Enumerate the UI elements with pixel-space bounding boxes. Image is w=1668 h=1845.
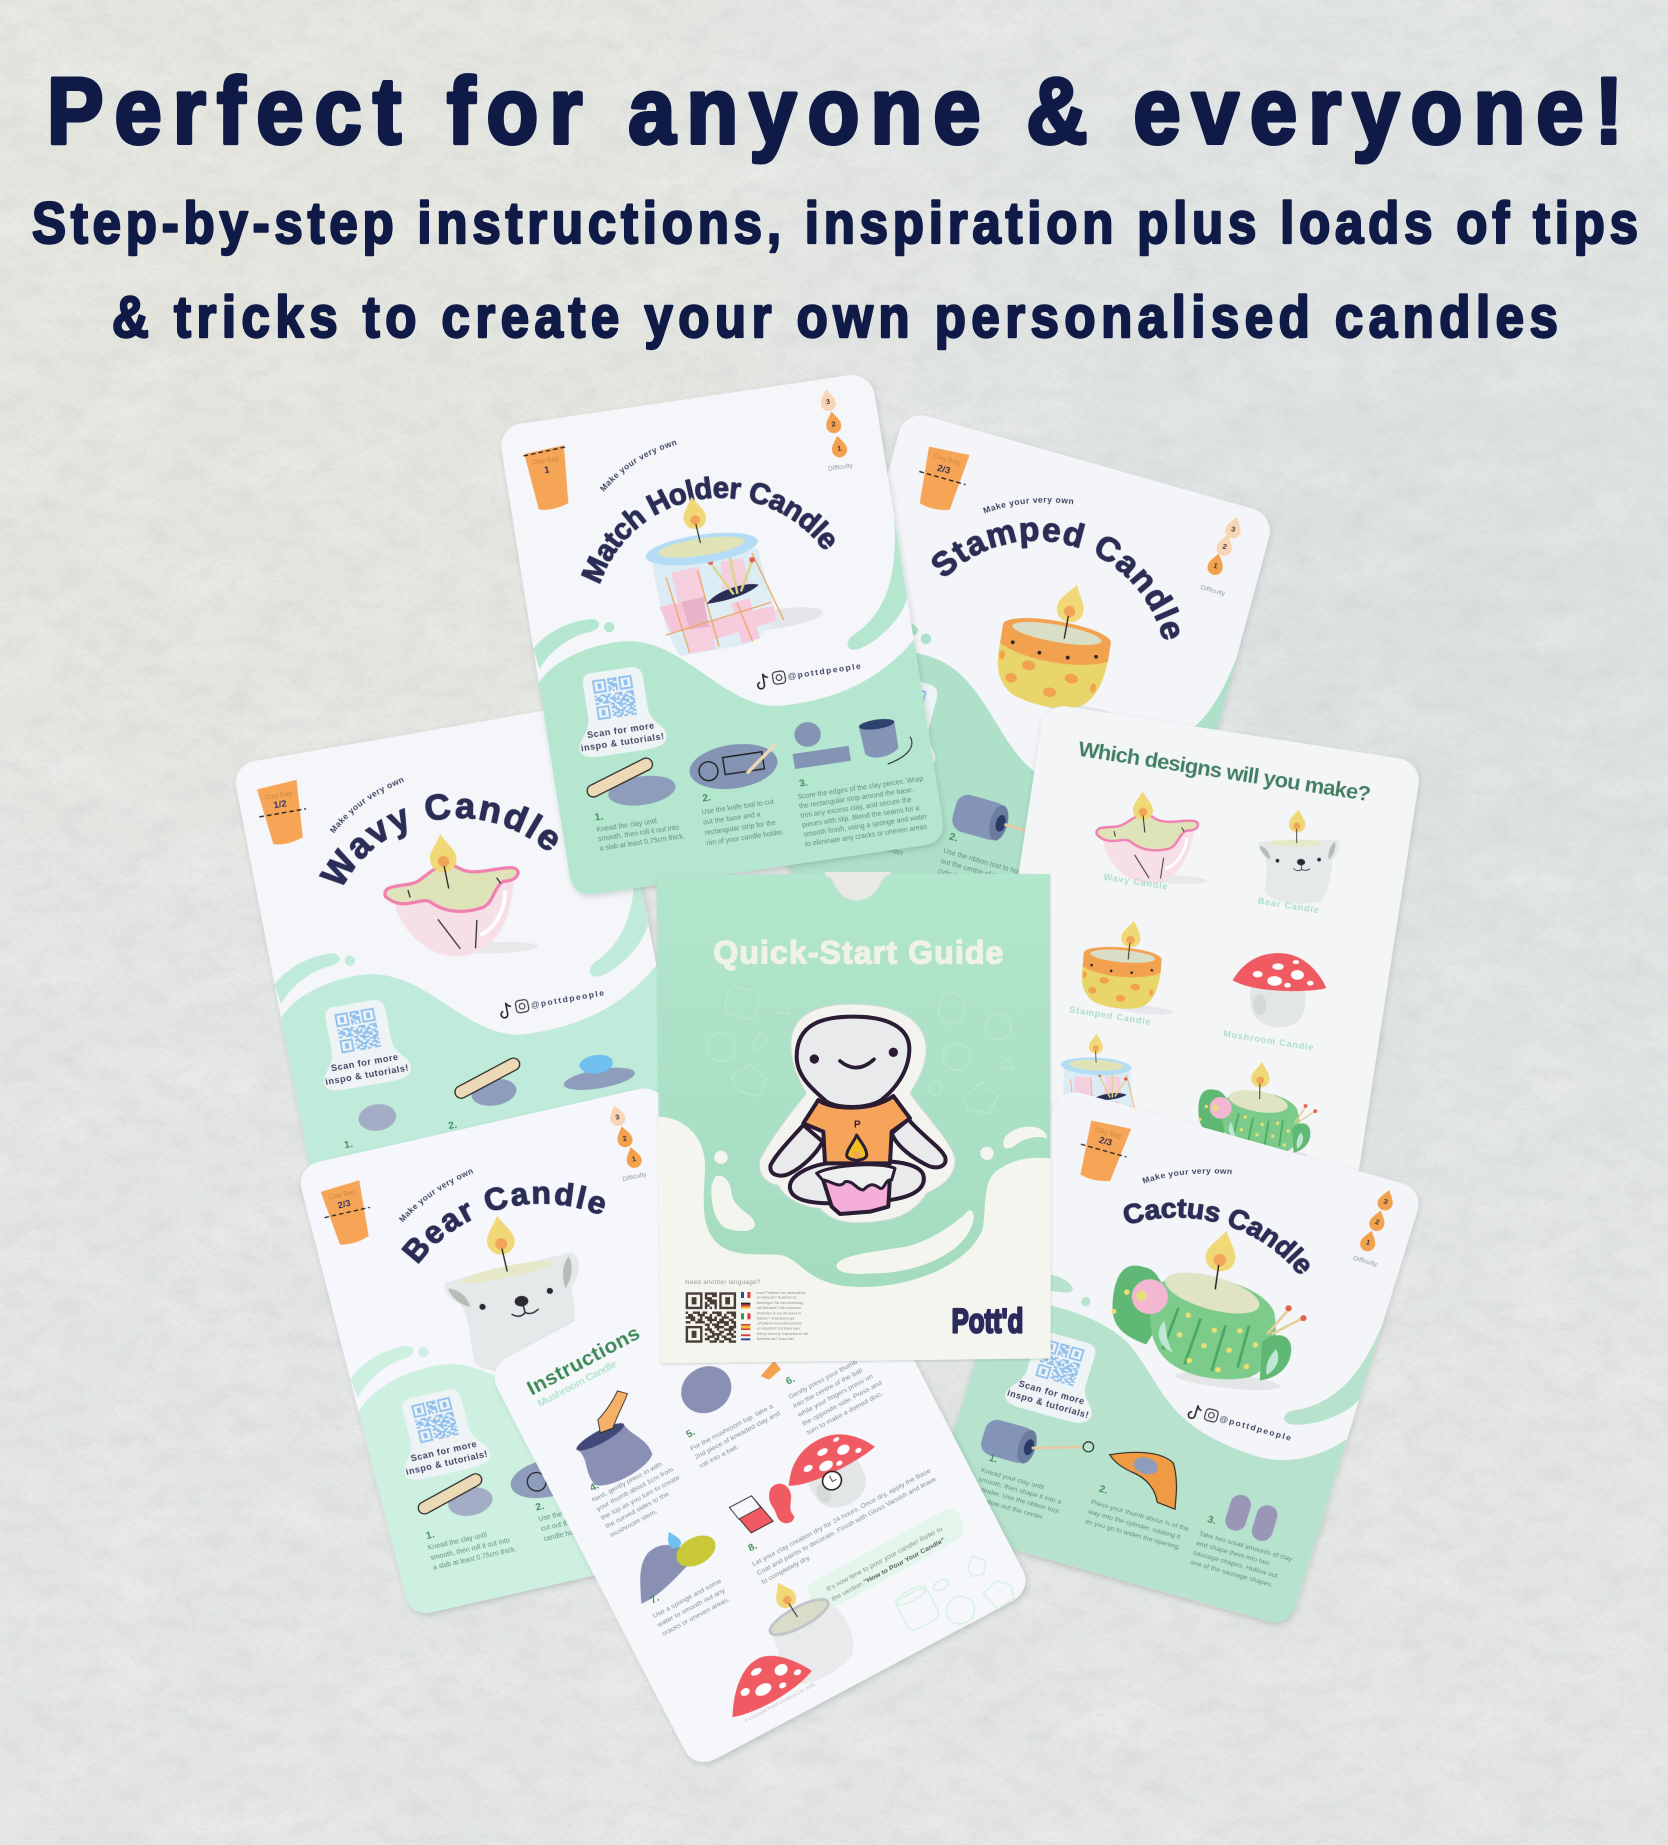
illustration: wavy candle	[382, 830, 539, 959]
step 2 ribbon tool: out the centre of the	[940, 857, 1003, 882]
difficulty scale: Difficulty	[1352, 1255, 1379, 1268]
icon: clay bag: 2/3	[1098, 1135, 1113, 1148]
design: cactus candle	[1183, 1043, 1332, 1178]
difficulty scale: 2	[1221, 542, 1228, 552]
step 2	[686, 738, 790, 848]
heading: make your very own: Make your very own	[982, 498, 1074, 514]
step 3	[786, 707, 931, 848]
social handle: @pottdpeople	[1218, 1413, 1293, 1443]
step 2	[506, 1449, 611, 1547]
step 1: a slab at least 0.75cm thick.	[432, 1546, 517, 1572]
design: stamped candle: Stamped Candle	[1069, 1005, 1152, 1027]
step 2: Use the knife tool to	[538, 1503, 599, 1523]
difficulty scale: 2	[1374, 1217, 1381, 1227]
panel: wavy candle card	[235, 711, 658, 1166]
panel: stamped candle card: inspo & tutorials!	[848, 733, 934, 766]
step 5	[660, 1344, 786, 1470]
language prompts: Heb je liever je instructies in het	[757, 1332, 808, 1336]
step 1: 1.	[594, 811, 604, 824]
illustration: match holder candle	[637, 481, 826, 659]
step 6: the opposite side. Press and	[801, 1380, 883, 1428]
step 1: 1.	[425, 1529, 436, 1542]
step 1: 1.	[987, 1453, 999, 1466]
step 1: cylinder. Use the ribbon tool	[975, 1485, 1060, 1515]
panel: instructions card	[487, 1188, 1033, 1770]
copyright: © Copyright Pott'd Creations Ltd. 2025	[744, 1681, 816, 1723]
subtitle line 1: Step-by-step instructions, inspiration plus loads of tips	[32, 191, 1638, 256]
step 4: your thumb about 1cm from	[595, 1466, 675, 1513]
panel: bear candle card: inspo & tutorials!	[405, 1449, 489, 1477]
step 3: one of the sausage shapes.	[1189, 1559, 1274, 1589]
step 5: 5.	[685, 1427, 697, 1441]
step 3: 3.	[798, 777, 809, 790]
design: stamped candle	[1069, 909, 1187, 1030]
panel: match holder candle card: Scan for more	[586, 720, 655, 740]
step 2: cut out the base and a	[540, 1511, 609, 1533]
design: mushroom candle	[1220, 940, 1337, 1054]
step 1: Knead your clay until	[980, 1467, 1045, 1491]
icon: clay bag: Clay Bag	[265, 790, 293, 802]
step 1	[964, 1414, 1095, 1528]
social handle: @pottdpeople	[530, 987, 605, 1010]
step 6: turn to make a domed disc.	[806, 1390, 884, 1437]
step 7: cracks or uneven areas.	[661, 1596, 731, 1638]
text: need another language: Need another language?	[685, 1279, 761, 1286]
step 4: 4.	[588, 1480, 601, 1494]
difficulty scale: 1	[631, 1154, 637, 1164]
step 6	[757, 1320, 888, 1444]
heading: make your very own: Make your very own	[398, 1169, 474, 1222]
design: mushroom candle: Mushroom Candle	[1223, 1029, 1315, 1053]
QR code	[686, 1294, 736, 1342]
step 2: as you go to widen the opening.	[1084, 1518, 1181, 1551]
icon: clay bag: Clay Bag	[532, 455, 559, 466]
pale line icons	[893, 1546, 1018, 1650]
pale candle icons	[707, 985, 1013, 1113]
icon: clay bag	[317, 1179, 378, 1248]
steps art	[333, 1036, 640, 1151]
flags	[741, 1292, 750, 1340]
panel: bear candle card: Scan for more	[410, 1439, 478, 1464]
panel: wavy candle card: inspo & tutorials!	[324, 1063, 410, 1087]
step 1: a slab at least 0.75cm thick.	[599, 833, 685, 853]
mascot: meditating figure with candle	[759, 1004, 955, 1223]
difficulty scale: 2	[622, 1133, 628, 1143]
panel: match holder candle card	[500, 375, 946, 900]
design: cactus candle: Cactus Candle	[1211, 1140, 1285, 1161]
step 2: rim of your candle holder.	[706, 829, 785, 847]
design: bear candle: Bear Candle	[1257, 896, 1320, 915]
panel: stamped candle card	[786, 416, 1272, 882]
icon: clay bag	[523, 445, 575, 512]
heading: Which designs will you make?	[1077, 736, 1373, 806]
step 8: to completely dry.	[760, 1554, 812, 1586]
step 3: sausage shapes. Hollow out	[1192, 1549, 1278, 1580]
step 5: For the mushroom top, take a	[689, 1403, 774, 1453]
subtitle line 2: & tricks to create your own personalised candles	[112, 285, 1558, 350]
step 3: 3.	[1206, 1514, 1217, 1527]
mascot: meditating figure with candle: P	[854, 1119, 861, 1130]
step 8	[743, 1452, 942, 1586]
icon: clay bag: 2/3	[337, 1198, 352, 1211]
icon: clay bag: 1/2	[273, 798, 288, 812]
illustration: bear candle	[435, 1207, 593, 1379]
step 7: 7.	[649, 1593, 661, 1607]
social handle	[756, 659, 862, 689]
step 3: smooth finish, using a sponge and water	[803, 814, 928, 839]
step 6: while your fingers press on	[796, 1373, 874, 1419]
heading: make your very own: Make your very own	[600, 440, 677, 492]
step 8: 8.	[747, 1541, 759, 1554]
panel: match holder candle card: inspo & tutorials!	[580, 731, 665, 753]
language prompts: Preferisci le tue istruzioni in	[757, 1312, 801, 1316]
difficulty scale: Difficulty	[622, 1171, 648, 1183]
social handle	[1188, 1404, 1293, 1446]
step 3: to eliminate any cracks or uneven areas.	[805, 823, 930, 848]
mushroom cap	[714, 1639, 816, 1722]
QR sticker	[1003, 1326, 1111, 1427]
step 3: Score the edges of the clay pieces. Wrap	[797, 776, 924, 801]
panel: which designs will you make card	[973, 703, 1422, 1227]
step 2 ribbon tool: 2.	[948, 831, 959, 845]
design: wavy candle	[1085, 777, 1221, 898]
step 3: Take two small amounts of clay	[1198, 1530, 1294, 1563]
panel: wavy candle card: Scan for more	[330, 1052, 399, 1074]
callout: pour your candle: It's now time to pour your candle! Refer to	[826, 1526, 944, 1593]
difficulty scale: 1	[1212, 561, 1219, 571]
step 1	[582, 753, 685, 853]
language prompts: vous Préférez vos instructions	[757, 1291, 806, 1295]
heading: make your very own: Make your very own	[330, 778, 404, 834]
step 1	[411, 1468, 517, 1572]
step 5: roll into a ball.	[698, 1444, 740, 1470]
heading: bear candle: Bear Candle	[401, 1182, 606, 1264]
icon: clay bag: Clay Bag	[932, 453, 961, 467]
difficulty scale: 3	[614, 1112, 620, 1122]
language prompts: ¿Prefieres tus instrucciones	[757, 1322, 802, 1326]
icon: clay bag: Clay Bag	[1094, 1126, 1122, 1140]
callout: pour your candle	[804, 1505, 970, 1615]
step 2 ribbon tool: cylinder	[937, 867, 963, 882]
difficulty scale	[1200, 512, 1246, 598]
icon: clay bag: Clay Bag	[328, 1189, 356, 1201]
heading: stamped candle: Stamped Candle	[931, 522, 1180, 640]
language prompts: en español? Escanea aquí	[757, 1327, 800, 1331]
heading: instructions: Instructions	[523, 1322, 644, 1400]
step 1: Knead the clay until	[596, 818, 658, 834]
difficulty scale: 2	[831, 419, 836, 429]
step 4: the top as you turn to create	[600, 1474, 681, 1522]
step 2: 2.	[1097, 1484, 1109, 1497]
heading: wavy candle: Wavy Candle	[318, 793, 558, 886]
difficulty scale: 3	[1230, 524, 1237, 534]
icon: clay bag	[911, 443, 973, 516]
step 3: trim any excess clay, and secure the	[800, 797, 912, 820]
language prompts: auf Deutsch? Hier scannen	[757, 1306, 801, 1310]
step 7: water to smooth out any	[656, 1587, 727, 1629]
difficulty scale: 1	[1365, 1238, 1371, 1247]
QR sticker: inspo & tutorials!	[1006, 1388, 1090, 1420]
icon: clay bag: 2/3	[936, 463, 951, 477]
booklet behind sleeve notch	[825, 872, 891, 904]
icon: clay bag	[254, 779, 312, 847]
step 3: pieces with slip. Blend the seams for a	[802, 805, 920, 830]
step 2: rectangular strip for the	[705, 820, 777, 837]
language prompts	[757, 1291, 808, 1341]
step 4: mushroom stem.	[609, 1509, 659, 1539]
step 7	[618, 1515, 743, 1640]
heading: mushroom candle: Mushroom Candle	[536, 1358, 619, 1410]
panel: bear candle card	[300, 1088, 660, 1618]
difficulty scale	[1352, 1186, 1400, 1268]
paint tube and splat	[730, 1479, 803, 1545]
step 3	[1189, 1487, 1307, 1592]
step 2: Use the knife tool to cut	[701, 799, 774, 816]
step 2: 2.	[534, 1501, 546, 1513]
step 4: Next, gently press in with	[591, 1461, 663, 1504]
steps art: 1.	[343, 1139, 354, 1151]
white lower section	[658, 1117, 1051, 1363]
design: wavy candle: Wavy Candle	[1103, 872, 1169, 892]
step 8: Coat and paints to decorate. Finish with Gloss Varnish and leave	[756, 1476, 938, 1577]
title: Perfect for anyone & everyone!	[47, 58, 1623, 163]
step 2: Press your thumb about ¾ of the	[1090, 1499, 1190, 1533]
difficulty scale: Difficulty	[828, 462, 854, 473]
step 1: smooth, then roll it out into	[430, 1537, 511, 1562]
step 6: Gently press your thumb	[788, 1359, 859, 1401]
difficulty scale	[816, 387, 854, 473]
difficulty scale: 3	[1382, 1197, 1389, 1207]
design: match holder candle	[1037, 1020, 1176, 1143]
panel: cactus candle card	[952, 1092, 1421, 1627]
design: bear candle	[1246, 800, 1349, 918]
design: match holder candle: Match Holder Candle	[1037, 1113, 1144, 1139]
heading: quick-start guide: Quick-Start Guide	[713, 934, 1003, 970]
steps art: 2.	[447, 1120, 458, 1132]
language prompts: en français? Scannez ici	[757, 1296, 796, 1300]
callout: pour your candle: the section "How to Pour Your Candle".	[831, 1536, 948, 1603]
difficulty scale	[604, 1102, 648, 1183]
difficulty scale: 1	[836, 443, 842, 453]
illustration: stamped candle	[991, 572, 1141, 724]
difficulty scale: 3	[825, 397, 831, 407]
heading: make your very own: Make your very own	[1142, 1168, 1232, 1184]
step 2: out the base and a	[703, 811, 761, 827]
step 6: into the centre of the ball	[792, 1367, 864, 1410]
step 1 fragment: into a cylinder	[860, 838, 904, 858]
step 2 ribbon tool: Use the ribbon tool to hollow	[943, 847, 1032, 879]
icon: clay bag: 1	[543, 464, 550, 476]
step 5: 2nd piece of kneaded clay and	[694, 1410, 782, 1461]
step 2	[1083, 1441, 1208, 1552]
step 2: way into the cylinder, rotating it	[1086, 1508, 1181, 1541]
illustration: cactus candle	[1104, 1218, 1316, 1396]
step 3: and shape them into two	[1195, 1540, 1271, 1567]
QR sticker: Scan for more	[1017, 1379, 1086, 1407]
step 1: smooth, then shape it into a	[977, 1476, 1062, 1506]
step 2 ribbon tool	[937, 792, 1072, 907]
language prompts: Nederlands? Scan hier	[757, 1337, 795, 1341]
step 7: Use a sponge and some	[652, 1578, 723, 1620]
logo: Pott'd	[952, 1303, 1023, 1341]
panel: quick-start guide sleeve	[657, 873, 1051, 1363]
step 2: 2.	[702, 793, 712, 805]
difficulty scale: Difficulty	[1200, 584, 1226, 598]
step 3: the rectangular strip around the base,	[799, 787, 914, 811]
step 6: 6.	[784, 1374, 797, 1388]
step 2: candle holder.	[543, 1527, 587, 1543]
step 1: Knead the clay until	[427, 1532, 488, 1552]
heading: match holder candle: Match Holder Candle	[580, 476, 835, 584]
step 4: the curved sides to the	[605, 1491, 671, 1531]
panel: stamped candle card: Scan for more	[860, 723, 929, 752]
language prompts: Benötigen Sie Ihre Anleitung	[757, 1301, 803, 1305]
language prompts: italiano? Scansiona qui	[757, 1316, 794, 1320]
social handle: @pottdpeople	[787, 661, 862, 682]
step 4	[553, 1384, 690, 1539]
social handle	[499, 986, 606, 1018]
step 8: Let your clay creation dry for 24 hours. Once dry, apply the Base	[751, 1468, 932, 1568]
pale candle	[746, 1562, 864, 1693]
step 1: smooth, then roll it out into	[598, 824, 680, 843]
painted mushroom with clock	[776, 1418, 893, 1525]
heading: cactus candle: Cactus Candle	[1123, 1198, 1310, 1274]
icon: clay bag	[1072, 1117, 1135, 1186]
step 1: to hollow out the center.	[972, 1495, 1045, 1521]
